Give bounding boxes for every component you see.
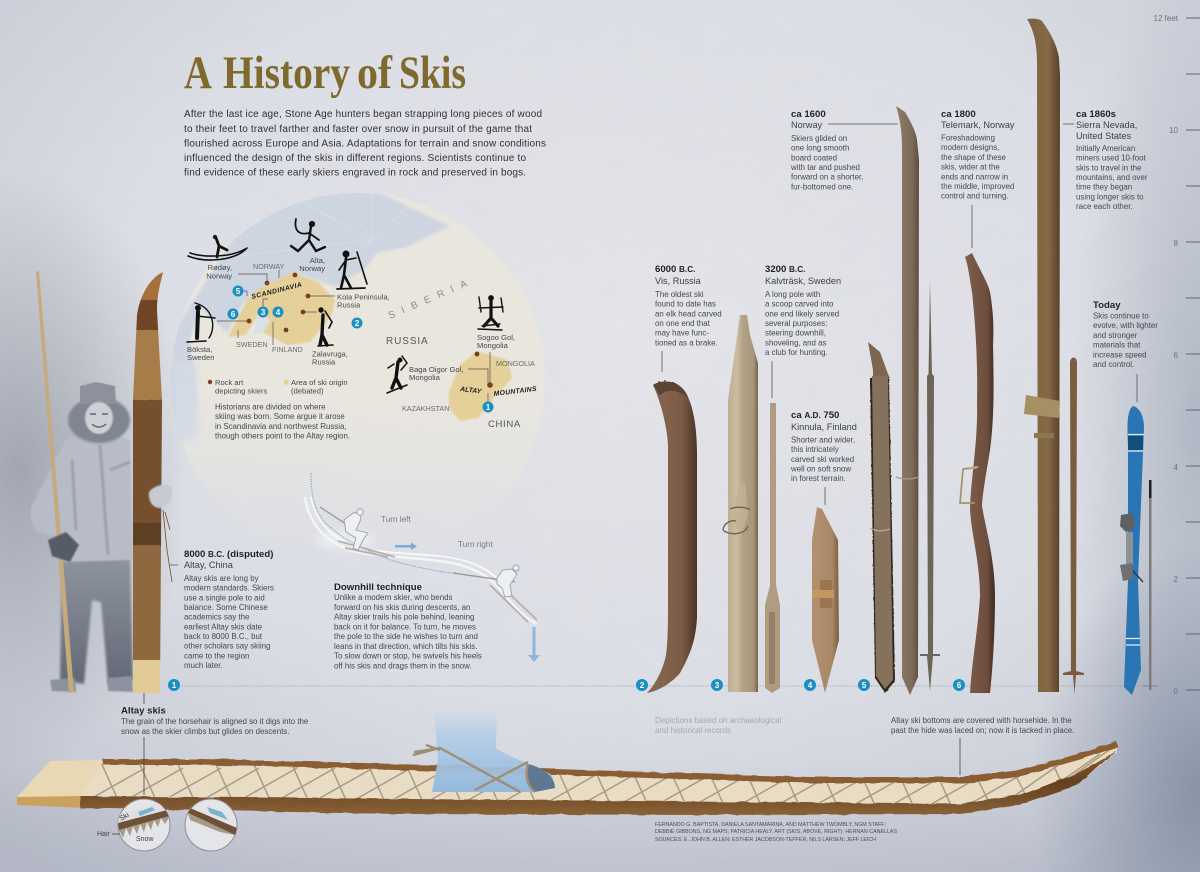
ruler: 12 feet xyxy=(1154,14,1179,23)
lacing xyxy=(94,750,1110,804)
intro text: flourished across Europe and Asia. Adaptations for terrain and snow conditions xyxy=(184,138,546,150)
leader: altay skis xyxy=(143,693,145,795)
map labels: Alta, xyxy=(310,256,325,265)
title xyxy=(184,47,466,99)
map legend: Rock art xyxy=(215,378,244,387)
icon: rock art Sogoo Gol xyxy=(478,296,503,330)
label: 8000 B.C.: came to the region xyxy=(184,651,249,660)
label: 8000 B.C.: earliest Altay skis date xyxy=(184,622,263,631)
binding xyxy=(960,467,977,503)
label: ca 1600: one long smooth xyxy=(791,144,849,153)
label: Today: and stronger xyxy=(1093,331,1138,340)
map labels: Norway xyxy=(299,264,325,273)
intro text: find evidence of these early skiers engraved in rock and preserved in bogs. xyxy=(184,168,526,178)
map labels: NORWAY xyxy=(253,262,285,271)
map labels: Rødøy, xyxy=(208,263,232,272)
leader lines xyxy=(217,270,490,402)
baseline dotted line xyxy=(182,685,1150,687)
label: ca A.D. 750: ca A.D. 750 xyxy=(791,410,839,421)
ruler xyxy=(1154,14,1200,696)
label: 8000 B.C.: 8000 B.C. (disputed) xyxy=(184,549,273,560)
label: 6000 B.C.: The oldest ski xyxy=(655,290,704,299)
label: ca 1800: ends and narrow in xyxy=(941,172,1008,181)
panel: globe map xyxy=(171,193,545,452)
map badges: 1 xyxy=(486,403,491,412)
label: 3200 B.C.: several purposes: xyxy=(765,319,827,328)
label: downhill technique xyxy=(334,582,482,670)
snow spray xyxy=(315,530,375,550)
inset: hair going uphill: Ski xyxy=(118,812,131,823)
map labels: MOUNTAINS xyxy=(493,386,537,398)
hair strands xyxy=(163,510,172,582)
label: 8000 B.C. xyxy=(170,549,274,670)
map labels: Mongolia xyxy=(477,341,509,350)
label: ca 1600: Norway xyxy=(791,120,823,130)
mitten xyxy=(149,485,172,508)
credits xyxy=(655,822,897,843)
label: ca 1800: Foreshadowing xyxy=(941,134,995,142)
label: 3200 B.C. xyxy=(765,264,841,398)
inset: hair going uphill: Hair xyxy=(97,831,111,838)
label: Today: Skis continue to xyxy=(1093,312,1149,320)
map note: skiing was born. Some argue it arose xyxy=(215,412,345,421)
label: downhill technique: Altay skier trails his pole behind, leaning xyxy=(334,612,474,622)
binding xyxy=(723,507,750,534)
ski 1860s: Sierra Nevada xyxy=(1024,19,1060,692)
label: ca A.D. 750 xyxy=(790,410,857,505)
label: altay skis: The grain of the horsehair is aligned so it digs into the xyxy=(121,717,309,726)
label: ca 1860s: race each other. xyxy=(1076,202,1133,211)
map labels: Zalavruga, xyxy=(312,350,348,358)
label: Today: and control. xyxy=(1093,360,1134,369)
map labels: Norway xyxy=(206,272,232,280)
label: 6000 B.C.: Vis, Russia xyxy=(655,276,702,286)
note: depictions xyxy=(655,716,782,735)
number badges: 6 xyxy=(957,681,962,690)
label: 8000 B.C.: Altay skis are long by xyxy=(184,574,259,583)
pole 1860s xyxy=(1063,358,1084,694)
label: ca 1800: the shape of these xyxy=(941,153,1007,162)
label: ca 1800: ca 1800 xyxy=(941,109,976,120)
number badges xyxy=(168,679,965,691)
map labels: KAZAKHSTAN xyxy=(402,404,449,413)
globe base xyxy=(171,193,545,452)
label: ca 1800: skis, wider at the xyxy=(941,163,1000,172)
ruler: 4 xyxy=(1174,463,1179,472)
label: ca 1860s: miners used 10-foot xyxy=(1076,154,1147,163)
map badges: 4 xyxy=(276,308,281,317)
label: 6000 B.C.: on one end that xyxy=(655,319,711,328)
label: ca 1600: board coated xyxy=(791,153,837,162)
credits: SOURCES: E. JOHN B. ALLEN; ESTHER JACOBSON-TEPFER; NILS LARSEN; JEFF LEICH xyxy=(655,837,876,843)
label: 6000 B.C.: an elk head carved xyxy=(655,309,722,318)
ski today: blue xyxy=(1120,406,1144,695)
ruler: 0 xyxy=(1174,687,1179,696)
downhill diagram xyxy=(305,473,540,662)
label: ca 1860s: skis to travel in the xyxy=(1076,163,1142,172)
ruler: 8 xyxy=(1174,239,1179,248)
label: Today: evolve, with lighter xyxy=(1093,321,1158,330)
map labels: CHINA xyxy=(488,419,521,430)
label: altay skis: snow as the skier climbs but glides on descents. xyxy=(121,727,289,736)
map labels: Baga Oigor Gol, xyxy=(409,365,463,374)
intro text: to their feet to travel farther and faster over snow in pursuit of the game that xyxy=(184,124,532,135)
boots xyxy=(50,676,133,692)
label: ca 1800 xyxy=(941,109,1015,248)
label: 8000 B.C.: much later. xyxy=(184,661,223,670)
skier figure xyxy=(31,271,133,693)
label: ca 1860s: using longer skis to xyxy=(1076,192,1144,201)
label: 3200 B.C.: a club for hunting. xyxy=(765,348,828,357)
label: ca 1600: fur-bottomed one. xyxy=(791,182,853,191)
straps xyxy=(413,745,535,792)
label: ca 1860s: time they began xyxy=(1076,183,1132,192)
map note: Historians are divided on where xyxy=(215,402,326,412)
map labels: RUSSIA xyxy=(386,336,429,347)
downhill diagram: Turn left xyxy=(381,515,411,524)
label: ca A.D. 750: carved ski worked xyxy=(791,455,854,464)
label: ca 1600 xyxy=(790,109,898,191)
label: 3200 B.C.: Kalvträsk, Sweden xyxy=(765,276,841,286)
label: ca A.D. 750: this intricately xyxy=(791,445,839,454)
face xyxy=(85,402,113,434)
label: ca 1600: with tar and pushed xyxy=(790,163,860,172)
map note: though others point to the Altay region. xyxy=(215,432,350,440)
map labels: FINLAND xyxy=(272,345,303,354)
label: ca 1800: the middle, improved xyxy=(941,182,1014,191)
rock art dots xyxy=(247,273,493,388)
label: 3200 B.C.: shoveling, and as xyxy=(765,338,826,347)
intro text: After the last ice age, Stone Age hunters began strapping long pieces of wood xyxy=(184,109,542,120)
intro text xyxy=(184,109,546,178)
label: 8000 B.C.: use a single pole to aid xyxy=(184,593,265,602)
map badges xyxy=(228,286,494,412)
label: ca 1800: modern designs, xyxy=(941,143,999,152)
map labels: Kola Peninsula, xyxy=(337,292,390,302)
pole today xyxy=(1142,480,1158,690)
credits: FERNANDO G. BAPTISTA, DANIELA SANTAMARINA, AND MATTHEW TWOMBLY, NGM STAFF; xyxy=(655,822,886,828)
label: 3200 B.C.: A long pole with xyxy=(765,290,820,299)
number badges: 4 xyxy=(808,681,813,690)
label: ca 1600: forward on a shorter, xyxy=(791,173,863,182)
number badges: 1 xyxy=(172,681,177,690)
jacket xyxy=(31,436,133,562)
map note xyxy=(215,402,350,440)
pole 5: spear xyxy=(920,281,940,691)
label: 8000 B.C.: academics say the xyxy=(184,613,250,622)
icon: rock art Rødøy xyxy=(188,235,247,260)
label: downhill technique: the pole to the side he wishes to turn and xyxy=(334,632,478,641)
deck xyxy=(80,745,1117,805)
ruler: 10 xyxy=(1169,126,1179,135)
icon: rock art Böksta xyxy=(187,303,215,342)
label: altay skis xyxy=(121,706,309,736)
top fur xyxy=(103,744,1117,780)
label: Today: materials that xyxy=(1093,341,1141,350)
label: ca 1860s: mountains, and over xyxy=(1076,173,1148,182)
map labels: Sogoo Gol, xyxy=(477,333,515,342)
map labels: Russia xyxy=(312,358,336,366)
label: Today: Today xyxy=(1093,300,1121,311)
label: 6000 B.C.: may have func- xyxy=(655,329,709,338)
large Altay ski xyxy=(17,742,1120,815)
label: ca A.D. 750: well on soft snow xyxy=(790,464,851,474)
map badges: 6 xyxy=(231,310,236,319)
label: ca 1860s: Sierra Nevada, xyxy=(1076,120,1137,130)
inset: hair going downhill xyxy=(185,799,237,851)
title: Skis xyxy=(399,47,466,99)
area of ski origin: Scandinavia xyxy=(228,272,335,345)
label: altay skis: Altay skis xyxy=(121,706,166,716)
note: depictions: and historical records xyxy=(655,726,731,735)
credits: DEBBIE GIBBONS, NG MAPS; PATRICIA HEALY. ART (SKIS, ABOVE, RIGHT): HERNAN CANELLAS xyxy=(655,829,897,835)
map labels xyxy=(187,256,537,430)
label: 6000 B.C.: tioned as a brake. xyxy=(655,338,718,347)
label: 8000 B.C.: modern standards. Skiers xyxy=(184,584,274,593)
label: downhill technique: Downhill technique xyxy=(334,582,422,593)
ski 6: Telemark xyxy=(960,253,995,693)
map labels: Böksta, xyxy=(187,345,212,354)
label: 6000 B.C. xyxy=(655,264,722,372)
map labels: MONGOLIA xyxy=(496,359,535,368)
label: ca 1600: Skiers glided on xyxy=(791,134,847,143)
label: Today xyxy=(1093,300,1158,402)
arrow: turn left xyxy=(395,542,417,550)
number badges: 3 xyxy=(715,681,720,690)
note: ski bottoms: past the hide was laced on; now it is tacked in place. xyxy=(891,726,1074,735)
ski 4: Kinnula, Finland xyxy=(812,507,839,693)
hat xyxy=(80,382,116,404)
note: ski bottoms: Altay ski bottoms are covered with horsehide. In the xyxy=(891,716,1072,725)
pole 3: scoop xyxy=(765,403,780,693)
area of ski origin: Altay xyxy=(449,351,512,421)
label: 3200 B.C.: 3200 B.C. xyxy=(765,264,805,275)
downhill diagram: Turn right xyxy=(458,540,493,549)
bottom fur xyxy=(80,750,1117,815)
label: downhill technique: back on it for balance. To turn, he moves xyxy=(334,622,476,631)
map note: in Scandinavia and northwest Russia, xyxy=(215,422,347,431)
icon: skier turning left xyxy=(320,507,395,557)
title: History xyxy=(223,47,350,99)
map labels: ALTAY xyxy=(459,386,483,396)
ski 3: Kalvträsk, Sweden xyxy=(723,315,758,692)
map labels: Mongolia xyxy=(409,373,441,382)
ski 2: Vis, Russia xyxy=(647,380,697,693)
label: 3200 B.C.: one end likely served xyxy=(765,309,839,318)
map labels: SCANDINAVIA xyxy=(251,282,303,301)
pole xyxy=(36,271,74,693)
map badges: 5 xyxy=(236,287,241,296)
map badges: 2 xyxy=(355,319,360,328)
legs xyxy=(60,552,133,684)
intro text: influenced the design of the skis in different regions. Scientists continue to xyxy=(184,153,526,164)
label: downhill technique: Unlike a modern skier, who bends xyxy=(334,593,452,602)
map labels: Sweden xyxy=(187,353,214,362)
number badges: 2 xyxy=(640,681,645,690)
label: ca 1600: ca 1600 xyxy=(791,109,826,120)
title: of xyxy=(357,47,393,99)
ski 5: long glider xyxy=(896,106,919,695)
inset: hair going uphill xyxy=(97,799,172,851)
icon: rock art Zalavruga xyxy=(318,308,333,346)
map legend: (debated) xyxy=(291,386,324,396)
inset: hair going uphill: Snow xyxy=(136,836,154,843)
label: 8000 B.C.: back to 8000 B.C., but xyxy=(184,632,263,641)
toe xyxy=(527,764,555,792)
number badges: 5 xyxy=(862,681,867,690)
ruler: 6 xyxy=(1174,351,1179,360)
map labels: Russia xyxy=(337,300,361,310)
ski 5: fur-bottomed xyxy=(868,342,895,693)
label: 6000 B.C.: 6000 B.C. xyxy=(655,264,695,275)
label: 8000 B.C.: Altay, China xyxy=(184,560,234,570)
label: ca A.D. 750: Shorter and wider, xyxy=(791,436,855,444)
note: depictions: Depictions based on archaeological xyxy=(655,716,782,725)
label: 8000 B.C.: other scholars say skiing xyxy=(184,642,270,651)
label: 3200 B.C.: steering downhill, xyxy=(765,329,826,338)
label: ca 1860s xyxy=(1063,109,1148,211)
ruler: 2 xyxy=(1174,575,1179,584)
label: ca A.D. 750: in forest terrain. xyxy=(791,474,846,483)
map labels: SIBERIA xyxy=(387,276,476,322)
map legend xyxy=(208,378,348,396)
label: 8000 B.C.: balance. Some Chinese xyxy=(184,603,268,612)
map labels: SWEDEN xyxy=(236,340,268,349)
ski 1: Altay xyxy=(133,272,172,693)
label: ca 1860s: Initially American xyxy=(1076,144,1135,153)
binding xyxy=(1120,513,1135,532)
label: ca 1800: Telemark, Norway xyxy=(941,120,1015,130)
label: 3200 B.C.: a scoop carved into xyxy=(765,300,834,309)
wood tail xyxy=(17,760,103,797)
map badges: 3 xyxy=(261,308,266,317)
label: ca 1860s: United States xyxy=(1076,131,1132,141)
label: downhill technique: off his skis and drags them in the snow. xyxy=(334,661,472,670)
arrow: turn right / down xyxy=(528,627,540,662)
label: 6000 B.C.: found to date has xyxy=(655,300,716,309)
title: A xyxy=(184,47,212,99)
label: downhill technique: forward on his skis during descents, an xyxy=(334,603,470,612)
note: ski bottoms xyxy=(891,716,1074,775)
icon: rock art Alta xyxy=(291,219,325,251)
label: downhill technique: leans in that direction, which tilts his skis. xyxy=(334,642,477,651)
glove xyxy=(48,532,79,562)
label: ca 1860s: ca 1860s xyxy=(1076,109,1116,120)
pole trace xyxy=(311,473,453,573)
icon: skier turning right xyxy=(453,565,537,622)
map legend: depicting skiers xyxy=(215,386,268,396)
hood xyxy=(68,397,130,443)
label: ca A.D. 750: Kinnula, Finland xyxy=(791,422,857,432)
label: downhill technique: To slow down or stop, he swivels his heels xyxy=(334,652,482,660)
map legend: Area of ski origin xyxy=(291,378,348,387)
label: ca 1800: control and turning. xyxy=(941,192,1009,201)
tracks xyxy=(305,497,537,624)
icon: rock art Kola xyxy=(337,251,367,289)
boot xyxy=(413,708,555,792)
icon: rock art Baga Oigor Gol xyxy=(387,356,407,393)
label: Today: increase speed xyxy=(1093,350,1147,359)
